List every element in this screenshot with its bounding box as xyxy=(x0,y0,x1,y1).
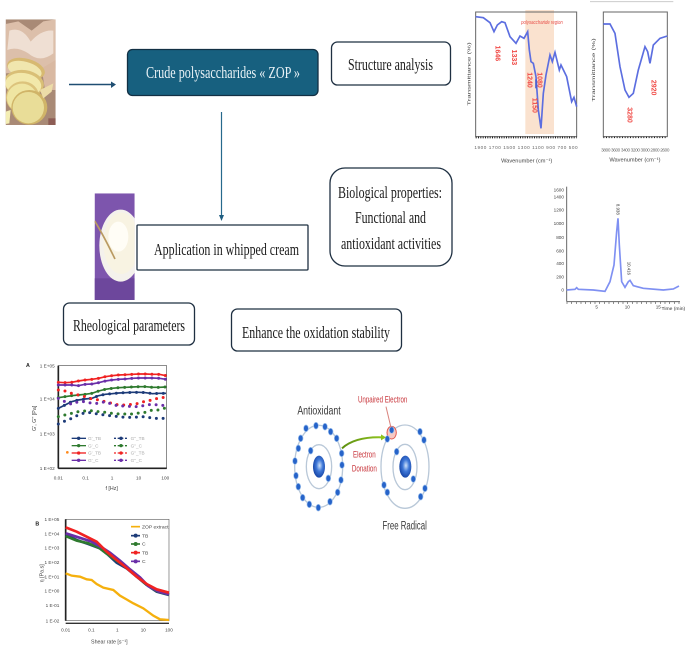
chart: FTIR spectrum high wavenumber: Transmittance (%) xyxy=(591,38,596,102)
chart: chromatogram: 600 xyxy=(556,248,564,253)
chart A: G' and G'' versus frequency: G'_TB xyxy=(88,451,101,456)
chart A: G' and G'' versus frequency: G''_TB xyxy=(131,451,145,456)
arrow: electron donation xyxy=(342,434,386,448)
image: ginger root and slices xyxy=(2,19,56,125)
box: crude polysaccharides ZOP: Crude polysaccharides « ZOP » xyxy=(146,63,300,82)
chart A: G' and G'' versus frequency: 1 E+04 xyxy=(40,397,55,402)
chart B: viscosity versus shear rate: 1 E-01 xyxy=(46,603,60,608)
chart A: G' and G'' versus frequency: 0.1 xyxy=(82,475,89,480)
chart: FTIR spectrum with polysaccharide region: 1240 xyxy=(526,72,533,88)
box: biological properties: antioxidant activities xyxy=(341,234,441,253)
chart: chromatogram: 800 xyxy=(556,235,564,240)
chart: chromatogram: 1600 xyxy=(554,188,564,193)
chart A: G' and G'' versus frequency: G'_C xyxy=(88,443,99,448)
chart: chromatogram: 10 xyxy=(625,305,630,310)
diagram: antioxidant electron donation to free radical: Electron xyxy=(353,450,376,460)
chart: chromatogram: 8.938 xyxy=(615,204,620,215)
box: structure analysis xyxy=(332,42,450,85)
box: application in whipped cream: Application in whipped cream xyxy=(154,240,299,259)
chart B: viscosity versus shear rate: 1 E-02 xyxy=(46,618,60,623)
chart A: G' and G'' versus frequency: 1 E+03 xyxy=(40,431,55,436)
diagram: antioxidant electron donation to free radical: Antioxidant xyxy=(297,403,341,417)
chart A: G' and G'' versus frequency: G'_TB xyxy=(88,436,101,441)
diagram: antioxidant electron donation to free radical xyxy=(293,395,429,532)
chart: FTIR spectrum with polysaccharide region: 1333 xyxy=(510,50,517,65)
chart: FTIR spectrum high wavenumber: Wavenumber (cm⁻¹) xyxy=(609,158,661,164)
chart A: G' and G'' versus frequency: 1 E+05 xyxy=(40,363,55,368)
chart: FTIR spectrum with polysaccharide region: 1646 xyxy=(494,46,501,61)
chart A: G' and G'' versus frequency: f [Hz] xyxy=(105,486,118,492)
box: application in whipped cream xyxy=(137,225,308,270)
chart B: viscosity versus shear rate: 10 xyxy=(141,628,146,633)
atom: free radical xyxy=(381,425,429,508)
chart A: G' and G'' versus frequency: G''_TB xyxy=(131,436,145,441)
chart: FTIR spectrum high wavenumber: 3280 xyxy=(625,107,632,123)
box: enhance the oxidation stability: Enhance the oxidation stability xyxy=(242,323,390,342)
chart: chromatogram: 0 xyxy=(561,288,564,293)
box: enhance the oxidation stability xyxy=(232,309,402,351)
chart: chromatogram: 400 xyxy=(556,261,564,266)
chart B: viscosity versus shear rate: 0.01 xyxy=(61,628,71,633)
chart A: G' and G'' versus frequency: G'_C xyxy=(88,458,99,463)
chart A: G' and G'' versus frequency: G''_C xyxy=(131,443,143,448)
chart B: viscosity versus shear rate: 1 E+04 xyxy=(44,531,60,536)
chart A: G' and G'' versus frequency: 100 xyxy=(161,475,170,480)
chart B: viscosity versus shear rate: 1 E+00 xyxy=(44,589,60,594)
atom: antioxidant xyxy=(293,422,344,511)
chart B: viscosity versus shear rate: 1 E+02 xyxy=(44,560,60,565)
chart B: viscosity versus shear rate: B xyxy=(35,522,39,528)
chart A: G' and G'' versus frequency: A xyxy=(26,363,30,369)
chart: FTIR spectrum high wavenumber: 2920 xyxy=(650,80,657,96)
chart: FTIR spectrum with polysaccharide region: Wavenumber (cm⁻¹) xyxy=(501,158,552,164)
chart A: G' and G'' versus frequency: 10 xyxy=(136,475,142,480)
chart: chromatogram: 1000 xyxy=(554,221,564,226)
chart: chromatogram: 5 xyxy=(595,305,598,310)
box: biological properties: Biological properties: xyxy=(338,183,442,202)
box: crude polysaccharides ZOP xyxy=(128,50,318,96)
chart B: viscosity versus shear rate: Shear rate [s⁻¹] xyxy=(91,639,128,645)
chart: chromatogram: 200 xyxy=(556,274,564,279)
box: rheological parameters xyxy=(64,303,194,345)
chart: chromatogram: 10.416 xyxy=(627,262,632,276)
chart A: G' and G'' versus frequency: G', G'' [Pa] xyxy=(32,405,38,431)
chart A: G' and G'' versus frequency: 1 xyxy=(111,475,114,480)
image: bowl of whipped cream xyxy=(94,193,135,300)
chart B: viscosity versus shear rate: 100 xyxy=(165,628,173,633)
chart B: viscosity versus shear rate: 1 xyxy=(116,628,119,633)
chart: FTIR spectrum high wavenumber xyxy=(590,2,673,164)
chart B: viscosity versus shear rate: η [Pa.s] xyxy=(39,564,45,582)
chart: chromatogram: 1400 xyxy=(554,194,564,199)
box: biological properties: Functional and xyxy=(355,208,426,227)
chart: chromatogram: 15 xyxy=(656,305,661,310)
chart: FTIR spectrum with polysaccharide region: 1150 xyxy=(530,98,537,113)
box: rheological parameters: Rheological parameters xyxy=(73,316,185,335)
chart B: viscosity versus shear rate: C xyxy=(142,559,146,565)
chart B: viscosity versus shear rate: C xyxy=(142,542,146,548)
chart B: viscosity versus shear rate xyxy=(35,517,173,645)
arrow: crude polysaccharides to application xyxy=(219,112,224,221)
chart B: viscosity versus shear rate: TB xyxy=(142,550,149,556)
chart B: viscosity versus shear rate: ZOP extract xyxy=(142,524,169,530)
chart B: viscosity versus shear rate: 1 E+01 xyxy=(44,574,60,579)
diagram: antioxidant electron donation to free radical: Donation xyxy=(352,464,377,474)
box: biological properties xyxy=(330,168,452,266)
chart: FTIR spectrum with polysaccharide region: polysaccharide region xyxy=(520,20,563,26)
chart A: G' and G'' versus frequency xyxy=(26,363,170,492)
chart B: viscosity versus shear rate: 0.1 xyxy=(88,628,95,633)
chart: FTIR spectrum with polysaccharide region xyxy=(467,10,578,164)
diagram: antioxidant electron donation to free radical: Unpaired Electron xyxy=(358,395,407,405)
diagram: antioxidant electron donation to free radical: Free Radical xyxy=(382,518,427,532)
box: structure analysis: Structure analysis xyxy=(348,55,433,74)
chart: chromatogram: 1200 xyxy=(554,208,564,213)
chart A: G' and G'' versus frequency: 0.01 xyxy=(54,475,63,480)
chart: FTIR spectrum with polysaccharide region: Transmittance (%) xyxy=(467,42,472,106)
chart: FTIR spectrum with polysaccharide region: 1900 1700 1500 1300 1100 900 700 500 xyxy=(474,145,578,150)
chart A: G' and G'' versus frequency: G''_C xyxy=(131,458,143,463)
chart B: viscosity versus shear rate: 1 E+03 xyxy=(44,546,60,551)
chart B: viscosity versus shear rate: TB xyxy=(142,533,149,539)
chart A: G' and G'' versus frequency: 1 E+02 xyxy=(40,466,55,471)
chart: chromatogram xyxy=(554,187,685,312)
chart: FTIR spectrum high wavenumber: 3800 3600 3400 3200 3000 2800 2600 xyxy=(601,148,670,153)
chart: FTIR spectrum with polysaccharide region: 1080 xyxy=(536,72,543,88)
chart B: viscosity versus shear rate: 1 E+05 xyxy=(44,517,60,522)
chart: chromatogram: Time (min) xyxy=(662,306,685,312)
arrow: ginger to crude polysaccharides xyxy=(69,82,116,88)
